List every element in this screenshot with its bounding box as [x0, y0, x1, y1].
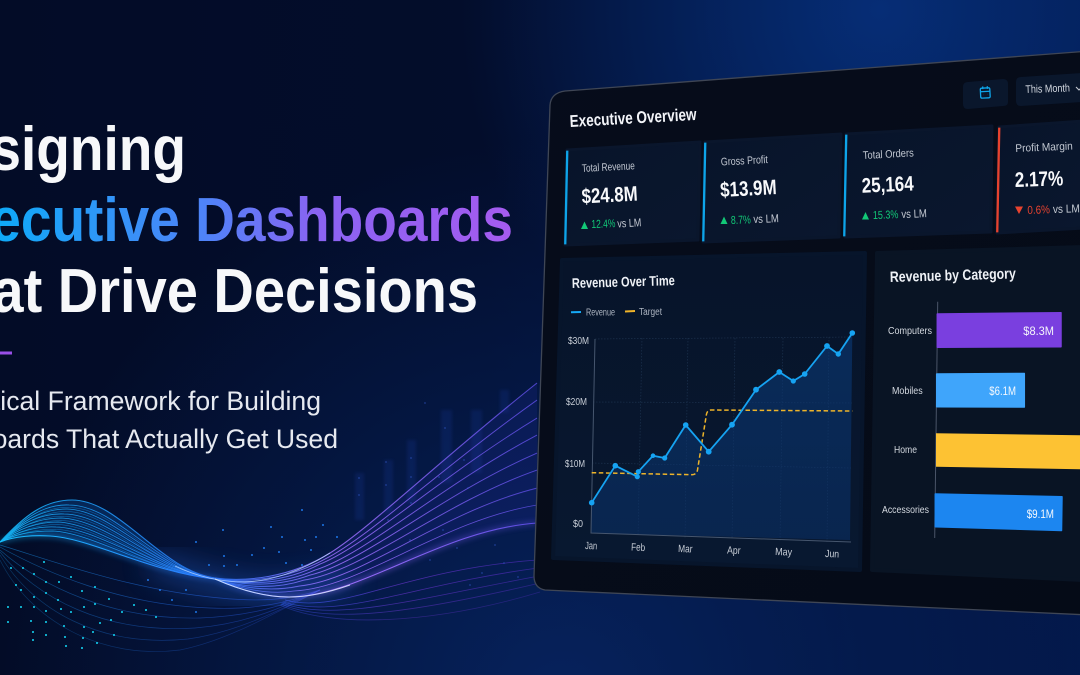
- y-axis labels: $20M: [566, 396, 587, 408]
- title: [0, 115, 513, 326]
- KPI card: gross profit: $13.9M: [720, 176, 777, 202]
- KPI card: total revenue: vs LM: [617, 217, 642, 230]
- KPI card: total orders: 15.3%: [873, 209, 899, 222]
- calendar button: [963, 79, 1008, 109]
- KPI card: total orders: vs LM: [901, 208, 927, 221]
- particle dots: [8, 403, 518, 648]
- period selector: [1016, 73, 1080, 106]
- y-axis labels: $10M: [565, 458, 585, 470]
- bar: computers: [888, 313, 1061, 347]
- bar: home: Home: [894, 444, 917, 456]
- x-axis labels: May: [775, 546, 793, 559]
- category axis: [935, 302, 938, 538]
- y-axis labels: $30M: [568, 335, 589, 347]
- bar: mobiles: [892, 374, 1024, 407]
- KPI card: profit margin: 2.17%: [1014, 167, 1064, 192]
- bar: accessories: Accessories: [882, 504, 929, 516]
- chart heading: Revenue Over Time: [572, 272, 675, 291]
- KPI card: total revenue: 12.4%: [591, 218, 616, 231]
- KPI card: total revenue: Total Revenue: [582, 160, 635, 175]
- KPI card: total revenue: $24.8M: [581, 183, 638, 208]
- x-axis labels: Jun: [825, 548, 839, 560]
- accent underline: [0, 352, 12, 354]
- x-axis labels: Jan: [585, 540, 597, 552]
- KPI card: total orders: 25,164: [861, 172, 914, 198]
- KPI card: total revenue: [564, 142, 700, 245]
- x-axis labels: [585, 540, 839, 560]
- KPI card: gross profit: 8.7%: [731, 214, 751, 227]
- panel: revenue over time: [553, 253, 865, 570]
- chart heading: Revenue by Category: [890, 265, 1017, 286]
- KPI card: profit margin: 0.6%: [1027, 204, 1050, 217]
- x-axis labels: Mar: [678, 543, 693, 556]
- bar: accessories: $9.1M: [1027, 507, 1054, 521]
- dashboard heading: Executive Overview: [569, 105, 698, 131]
- dashboard tablet: [534, 51, 1080, 615]
- y-axis labels: [565, 335, 589, 530]
- bar: mobiles: Mobiles: [892, 385, 923, 397]
- wave graphic: [0, 383, 540, 652]
- bar: computers: Computers: [888, 325, 932, 337]
- line chart: [589, 330, 855, 542]
- KPI card: total orders: Total Orders: [863, 147, 915, 162]
- bar: computers: $8.3M: [1023, 324, 1054, 338]
- x-axis labels: Feb: [631, 542, 645, 554]
- bar: mobiles: $6.1M: [989, 384, 1016, 398]
- bar: home: [894, 433, 1080, 469]
- KPI card: total orders: [844, 126, 992, 237]
- legend: Target: [639, 307, 662, 318]
- KPI card: gross profit: [702, 134, 841, 242]
- y-axis labels: $0: [573, 518, 583, 530]
- KPI card: profit margin: [996, 121, 1080, 233]
- KPI card: profit margin: Profit Margin: [1015, 141, 1073, 155]
- subtitle: [0, 386, 338, 454]
- legend: [571, 307, 662, 318]
- period selector: This Month: [1025, 82, 1070, 96]
- x-axis labels: Apr: [727, 545, 741, 557]
- KPI card: gross profit: Gross Profit: [721, 154, 768, 168]
- bar: accessories: [882, 494, 1062, 530]
- KPI card: gross profit: vs LM: [753, 213, 779, 226]
- panel: revenue by category: [872, 247, 1080, 580]
- legend: Revenue: [586, 308, 615, 318]
- decorative data pillars: [355, 390, 509, 520]
